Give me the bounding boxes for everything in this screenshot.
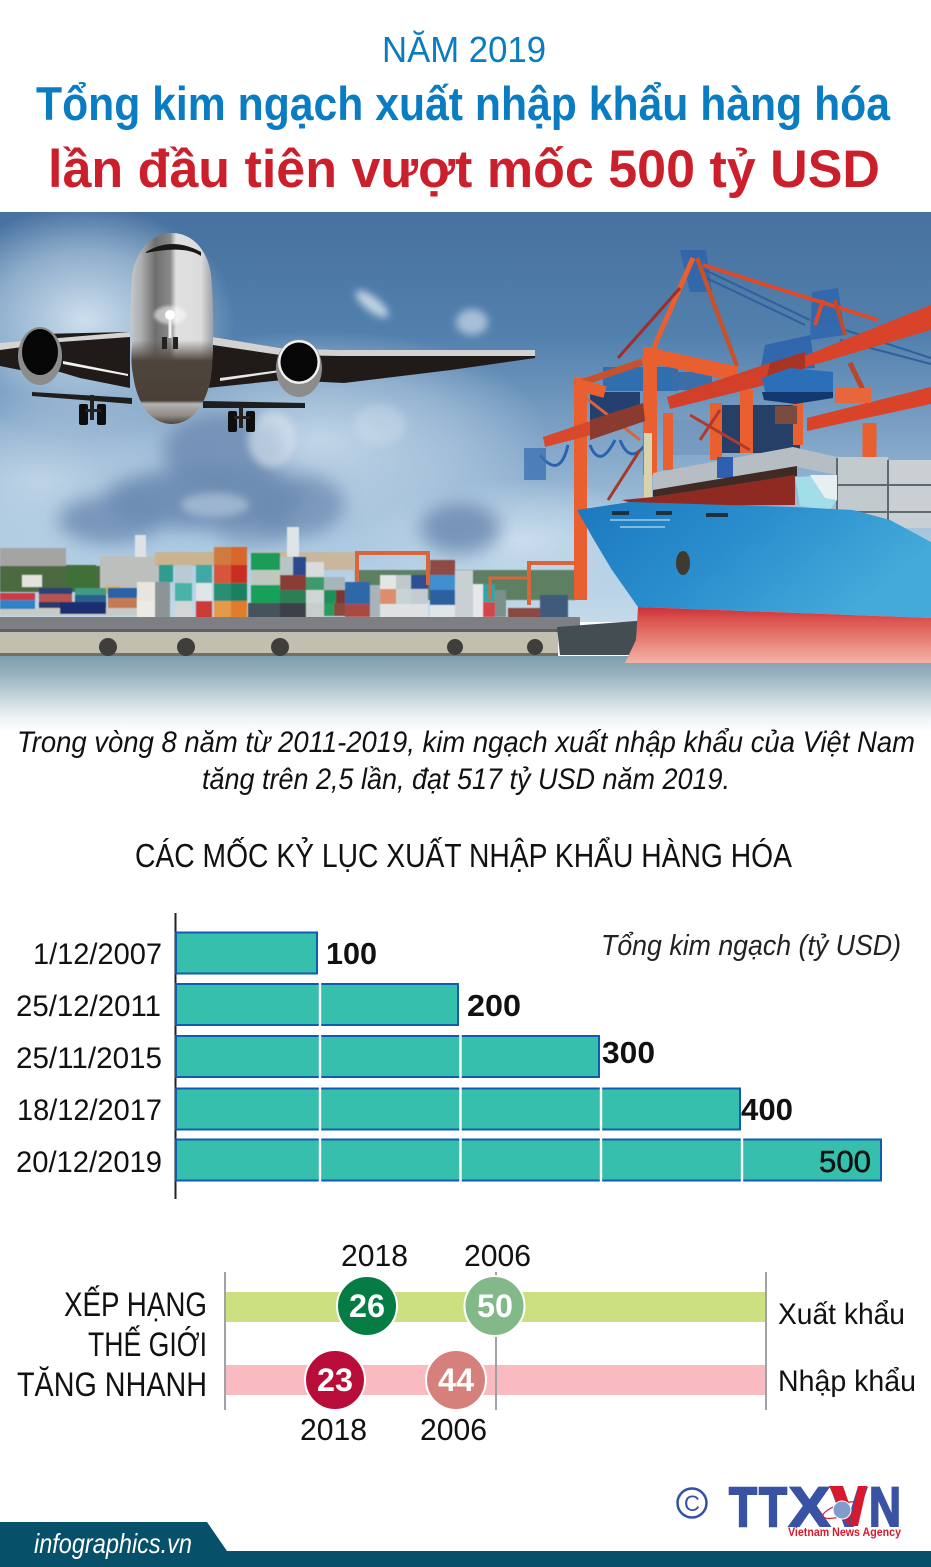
bar chart: record milestones bbox=[16, 913, 901, 1199]
chart axis bbox=[174, 913, 176, 1199]
date labels bbox=[16, 938, 162, 1179]
distant gantry cranes bbox=[357, 553, 575, 605]
port buildings bbox=[0, 527, 575, 600]
ship hull bbox=[577, 502, 931, 663]
intro text: tăng trên 2,5 lần, đạt 517 tỷ USD năm 2019. bbox=[202, 763, 730, 796]
quay bbox=[0, 617, 650, 658]
fuselage bbox=[131, 233, 213, 424]
ranking heading bbox=[17, 1286, 207, 1404]
ranking heading: TĂNG NHANH bbox=[17, 1366, 207, 1404]
year labels: 2018 bbox=[341, 1238, 408, 1273]
landing gear bbox=[92, 395, 241, 428]
value labels: 300 bbox=[602, 1035, 655, 1070]
export band bbox=[226, 1292, 766, 1322]
year labels: 2006 bbox=[464, 1238, 531, 1273]
airplane bbox=[0, 233, 535, 432]
logo: TTXVN bbox=[729, 1475, 902, 1539]
footer site name: infographics.vn bbox=[34, 1528, 192, 1559]
rank circle: 23 bbox=[305, 1350, 365, 1410]
rank circle: 23: 23 bbox=[317, 1362, 353, 1398]
rank circle: 50 bbox=[464, 1276, 524, 1336]
crane machinery blue bbox=[524, 250, 931, 480]
import band bbox=[226, 1365, 766, 1395]
value labels: 100 bbox=[326, 936, 377, 971]
clouds bbox=[58, 286, 500, 554]
icon: copyright: C bbox=[684, 1491, 700, 1516]
legend: export: Xuất khẩu bbox=[778, 1298, 905, 1331]
year labels: 2018 bbox=[300, 1412, 367, 1447]
icon: copyright bbox=[678, 1488, 706, 1518]
water bbox=[0, 656, 931, 732]
title: year: NĂM 2019 bbox=[382, 29, 546, 70]
container stacks bbox=[137, 547, 568, 623]
value labels: 200 bbox=[467, 988, 521, 1023]
date labels: 25/12/2011 bbox=[16, 990, 161, 1023]
logo: TTXVN: T bbox=[729, 1475, 757, 1538]
chart heading: CÁC MỐC KỶ LỤC XUẤT NHẬP KHẨU HÀNG HÓA bbox=[135, 836, 792, 874]
ship containers bbox=[622, 447, 931, 530]
intro text bbox=[17, 726, 915, 796]
ranking heading: XẾP HẠNG bbox=[64, 1286, 207, 1324]
sky bbox=[0, 205, 931, 622]
logo: TTXVN: N bbox=[869, 1475, 901, 1538]
unit note: Tổng kim ngạch (tỷ USD) bbox=[601, 930, 901, 962]
rank circle: 44 bbox=[426, 1350, 486, 1410]
legend: import: Nhập khẩu bbox=[778, 1365, 916, 1398]
year labels bbox=[300, 1238, 531, 1447]
main boom bbox=[802, 305, 931, 368]
bars bbox=[176, 932, 881, 1180]
value labels bbox=[326, 936, 871, 1179]
rank circle: 26: 26 bbox=[349, 1288, 385, 1324]
hero photo: plane, port and container ship bbox=[0, 205, 931, 732]
left wing bbox=[0, 332, 130, 388]
right wing bbox=[207, 337, 535, 388]
title block bbox=[36, 29, 891, 199]
copyright and agency logo bbox=[678, 1475, 902, 1539]
logo: TTXVN: V bbox=[831, 1475, 867, 1538]
value labels: 500 bbox=[819, 1144, 871, 1179]
low containers left bbox=[0, 588, 140, 616]
title: line 3: lần đầu tiên vượt mốc 500 tỷ USD bbox=[48, 140, 880, 199]
engines bbox=[18, 327, 62, 385]
logo: TTXVN: T bbox=[759, 1475, 787, 1538]
trolley bbox=[762, 368, 833, 392]
date labels: 20/12/2019 bbox=[16, 1146, 162, 1179]
crane frame bbox=[575, 258, 878, 600]
rank circle: 26 bbox=[337, 1276, 397, 1336]
footer banner bbox=[0, 1522, 931, 1567]
rank circle: 44: 44 bbox=[438, 1362, 474, 1398]
stabilisers bbox=[32, 392, 132, 404]
logo: TTXVN: X bbox=[789, 1475, 830, 1538]
world ranking chart bbox=[17, 1238, 916, 1447]
date labels: 18/12/2017 bbox=[17, 1094, 162, 1127]
gantry crane bbox=[524, 250, 931, 600]
year labels: 2006 bbox=[420, 1412, 487, 1447]
date labels: 25/11/2015 bbox=[16, 1042, 162, 1075]
date labels: 1/12/2007 bbox=[33, 938, 162, 971]
logo: TTXVN: Vietnam News Agency bbox=[788, 1527, 902, 1539]
value labels: 400 bbox=[741, 1092, 793, 1127]
ranking heading: THẾ GIỚI bbox=[88, 1326, 207, 1364]
cream pole bbox=[644, 433, 652, 501]
rank circle: 50: 50 bbox=[477, 1288, 513, 1324]
